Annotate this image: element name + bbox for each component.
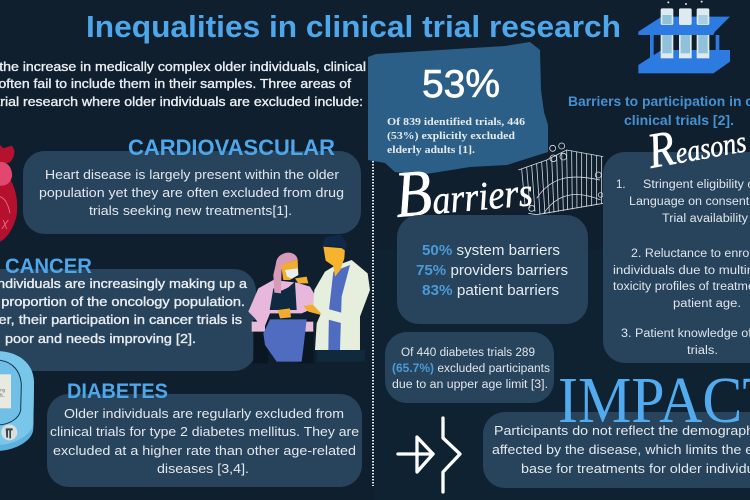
patient mask: [285, 268, 298, 279]
cardiovascular body: [39, 168, 344, 218]
doctor coat: [313, 260, 370, 350]
barriers statistics list: 83% patient barriers: [422, 283, 559, 299]
panel: reasons: [603, 152, 750, 363]
icon: arrow into chevron: [398, 418, 460, 492]
stat description: Of 839 identified trials, 446: [387, 117, 525, 128]
hands: [278, 277, 325, 318]
patient vest: [270, 282, 297, 310]
icon: gate: [518, 143, 603, 215]
barriers subheading: [568, 93, 750, 128]
icon: test tube rack: [638, 1, 730, 73]
cancer body: poor and needs improving [2].: [5, 332, 196, 346]
cardiovascular body: trials seeking new treatments[1].: [89, 204, 292, 218]
diabetes body: excluded at a higher rate than other age-related: [53, 444, 356, 458]
doctor scrubs: [328, 265, 350, 350]
barriers subheading: clinical trials [2].: [624, 112, 734, 128]
diabetes trials text: (65.7%) excluded participants: [392, 363, 550, 375]
intro text block: [0, 60, 366, 109]
patient face: [281, 259, 298, 280]
barriers script heading: Barriers: [392, 147, 535, 232]
cancer body: [0, 277, 247, 346]
cardiovascular body: Heart disease is largely present within the older: [45, 168, 339, 182]
heading: diabetes: DIABETES: [67, 380, 168, 403]
diabetes trials text: [392, 347, 550, 391]
title: Inequalities in clinical trial research: [86, 9, 621, 44]
reasons list: [613, 179, 750, 357]
impact body: [492, 424, 750, 476]
reasons list: 1.: [616, 179, 626, 191]
patient scarf: [273, 253, 298, 293]
panel: diabetes trials stat: [385, 332, 554, 403]
reasons list: patient age.: [673, 298, 741, 310]
chair arms: [252, 322, 313, 332]
panel: impact: [483, 364, 750, 488]
heading: cardiovascular: CARDIOVASCULAR: [128, 135, 335, 160]
icon: heart: [0, 142, 17, 242]
stat description: (53%) explicitly excluded: [387, 131, 515, 142]
barriers statistics list: [416, 243, 568, 299]
reasons list: trials.: [687, 345, 718, 357]
diabetes trials text: Of 440 diabetes trials 289: [401, 347, 535, 359]
diabetes trials text: due to an upper age limit [3].: [392, 379, 548, 391]
panel: barriers stats: [397, 215, 588, 324]
diabetes body: diseases [3,4].: [157, 462, 249, 476]
impact body: base for treatments for older individuals.: [521, 462, 750, 476]
reasons list: Trial availability: [662, 213, 748, 225]
stat description: [387, 117, 525, 156]
divider dotted: [372, 161, 374, 486]
panel: cancer: [0, 255, 256, 371]
doctor coat arm: [320, 307, 358, 325]
panel: cardiovascular: [23, 135, 361, 234]
doctor head: [323, 247, 345, 277]
patient top: [248, 280, 321, 330]
panel: 53 percent: [368, 42, 548, 175]
illustration: patient and doctor: [248, 235, 370, 363]
icon: glucose meter: [0, 351, 34, 451]
diabetes body: Older individuals are regularly excluded from: [64, 407, 344, 421]
panel: diabetes: [47, 380, 362, 487]
cardiovascular body: population yet they are often excluded from drug: [39, 186, 344, 200]
stat: 53%: 53%: [422, 63, 500, 106]
doctor trousers: [317, 350, 365, 362]
diabetes body: clinical trials for type 2 diabetes mellitus. They are: [50, 425, 359, 439]
patient trousers: [263, 319, 307, 362]
diabetes body: [50, 407, 359, 476]
chair: [253, 320, 313, 363]
barriers statistics list: 75% providers barriers: [416, 263, 568, 279]
doctor hair: [322, 235, 347, 251]
barriers statistics list: 50% system barriers: [422, 243, 560, 259]
stat description: elderly adults [1].: [387, 145, 475, 156]
heading: cancer: CANCER: [5, 255, 92, 278]
